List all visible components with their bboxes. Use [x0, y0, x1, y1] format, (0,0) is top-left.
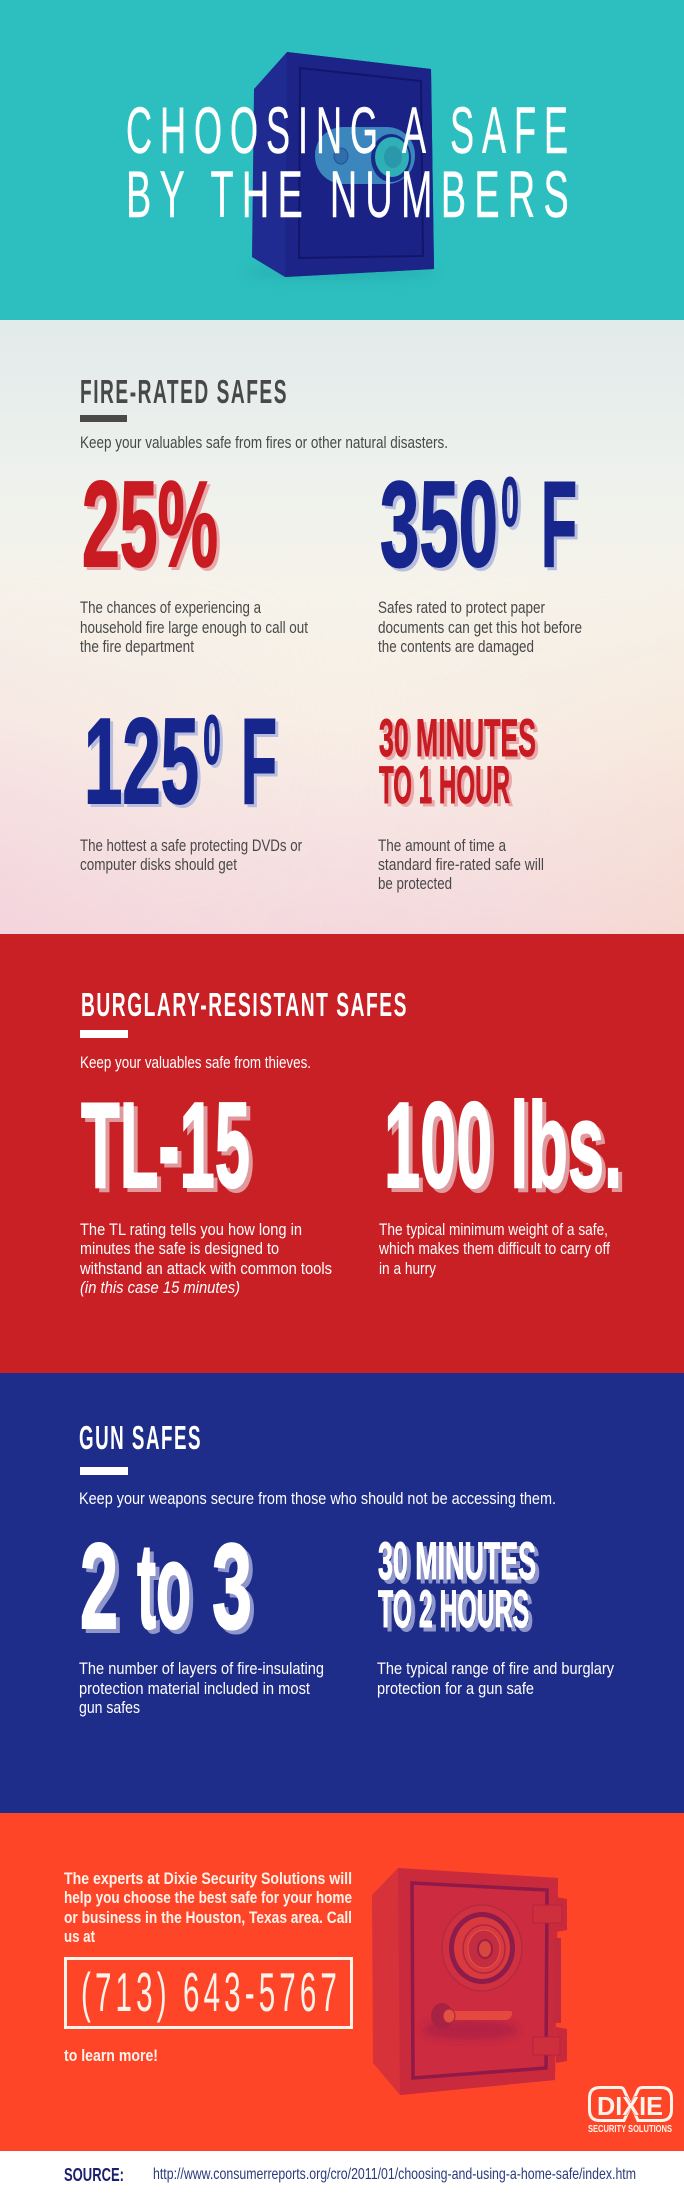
stat description: 350 F: the contents are damaged: [378, 637, 534, 656]
stat: 350 F: 0: [501, 463, 519, 541]
heading: burglary-resistant safes: BURGLARY-RESISTANT SAFES: [81, 986, 408, 1023]
stat description: 100 lbs.: which makes them difficult to carry off: [378, 1239, 610, 1258]
stat description: 2 to 3: protection material included in most: [79, 1679, 310, 1698]
logo: Dixie Security Solutions: [588, 2088, 672, 2135]
call to action text: [64, 1869, 352, 1946]
heading bar: [80, 415, 127, 422]
stat description: 350 F: Safes rated to protect paper: [378, 598, 545, 617]
stat description: 25%: household fire large enough to call out: [80, 618, 308, 637]
stat: 30 minutes to 2 hours: 30 MINUTES: [378, 1532, 536, 1591]
closing text: to learn more!: [64, 2046, 158, 2065]
logo: Dixie Security Solutions: DIXIE: [597, 2091, 663, 2121]
stat: 30 minutes to 2 hours: [378, 1532, 536, 1639]
heading bar: [80, 1030, 128, 1038]
stat description: 30 minutes to 2 hours: [377, 1659, 614, 1698]
stat description: 30 minutes to 2 hours: protection for a gun safe: [377, 1679, 534, 1698]
stat: 2 to 3: to: [137, 1518, 191, 1654]
source line: [64, 2165, 636, 2185]
illustration: red safe: [372, 1868, 567, 2095]
stat: 30 minutes to 1 hour: TO 1 HOUR: [379, 756, 510, 815]
stat description: 350 F: [378, 598, 582, 656]
stat description: 2 to 3: gun safes: [79, 1698, 140, 1717]
phone number box: [66, 1958, 352, 2028]
stat description: 100 lbs.: in a hurry: [379, 1259, 436, 1278]
stat description: 350 F: documents can get this hot before: [378, 618, 582, 637]
stat: 125 F: 0: [203, 701, 221, 779]
stat description: 2 to 3: The number of layers of fire-insulating: [79, 1659, 324, 1678]
stat description: TL-15: The TL rating tells you how long in: [80, 1220, 302, 1239]
heading: fire-rated safes: FIRE-RATED SAFES: [80, 373, 288, 410]
stat description: 100 lbs.: The typical minimum weight of a safe,: [379, 1220, 608, 1239]
panel: fire-rated safes: [0, 320, 684, 934]
stat description: 125 F: computer disks should get: [80, 855, 237, 874]
stat description: TL-15: [79, 1220, 332, 1297]
title: [126, 93, 577, 231]
heading bar: [80, 1467, 128, 1475]
stat description: 2 to 3: [79, 1659, 324, 1717]
illustration: blue safe: [240, 52, 440, 279]
stat description: 30 minutes to 1 hour: standard fire-rated safe will: [378, 855, 544, 874]
stat: 2 to 3: 3: [212, 1518, 252, 1654]
stat description: 100 lbs.: [378, 1220, 610, 1278]
panel: header: [0, 0, 684, 320]
stat description: 125 F: The hottest a safe protecting DVDs or: [80, 836, 302, 855]
stat description: TL-15: withstand an attack with common tools: [79, 1259, 332, 1278]
source line: SOURCE:: [64, 2165, 124, 2185]
stat description: 30 minutes to 1 hour: be protected: [378, 874, 452, 893]
stat: 2 to 3: 2: [80, 1518, 118, 1654]
call to action text: or business in the Houston, Texas area. Call: [64, 1908, 352, 1927]
panel: fire-rated safes: F: [541, 456, 577, 592]
panel: call to action: [0, 1813, 684, 2151]
stat: 350 F: 350: [380, 456, 498, 592]
call to action text: help you choose the best safe for your home: [64, 1888, 352, 1907]
stat: 30 minutes to 1 hour: [379, 709, 536, 815]
intro text: Keep your valuables safe from thieves.: [80, 1053, 311, 1072]
stat description: 30 minutes to 1 hour: [378, 836, 544, 893]
intro text: Keep your weapons secure from those who should not be accessing them.: [79, 1489, 556, 1508]
stat description: 30 minutes to 2 hours: The typical range of fire and burglary: [377, 1659, 614, 1678]
stat description: 125 F: [80, 836, 302, 874]
phone number box: (713) 643-5767: [81, 1961, 341, 2023]
call to action text: us at: [64, 1927, 95, 1946]
stat description: 25%: [80, 598, 308, 656]
stat description: 30 minutes to 1 hour: The amount of time a: [378, 836, 506, 855]
panel: fire-rated safes: F: [241, 693, 277, 829]
panel: gun safes: [0, 1373, 684, 1813]
stat: TL-15: TL-15: [81, 1077, 250, 1213]
panel: burglary-resistant safes: [0, 934, 684, 1373]
stat description: TL-15: minutes the safe is designed to: [80, 1239, 279, 1258]
stat: 30 minutes to 1 hour: 30 MINUTES: [379, 709, 536, 768]
call to action text: The experts at Dixie Security Solutions will: [64, 1869, 352, 1888]
stat: 125 F: 125: [84, 693, 199, 829]
intro text: Keep your valuables safe from fires or other natural disasters.: [80, 433, 448, 452]
stat: 25%: 25%: [82, 456, 218, 592]
stat description: 25%: the fire department: [80, 637, 194, 656]
heading: gun safes: GUN SAFES: [79, 1419, 202, 1456]
stat description: TL-15: (in this case 15 minutes): [80, 1278, 240, 1297]
stat description: 25%: The chances of experiencing a: [80, 598, 261, 617]
stat: 2 to 3: [80, 1518, 252, 1654]
